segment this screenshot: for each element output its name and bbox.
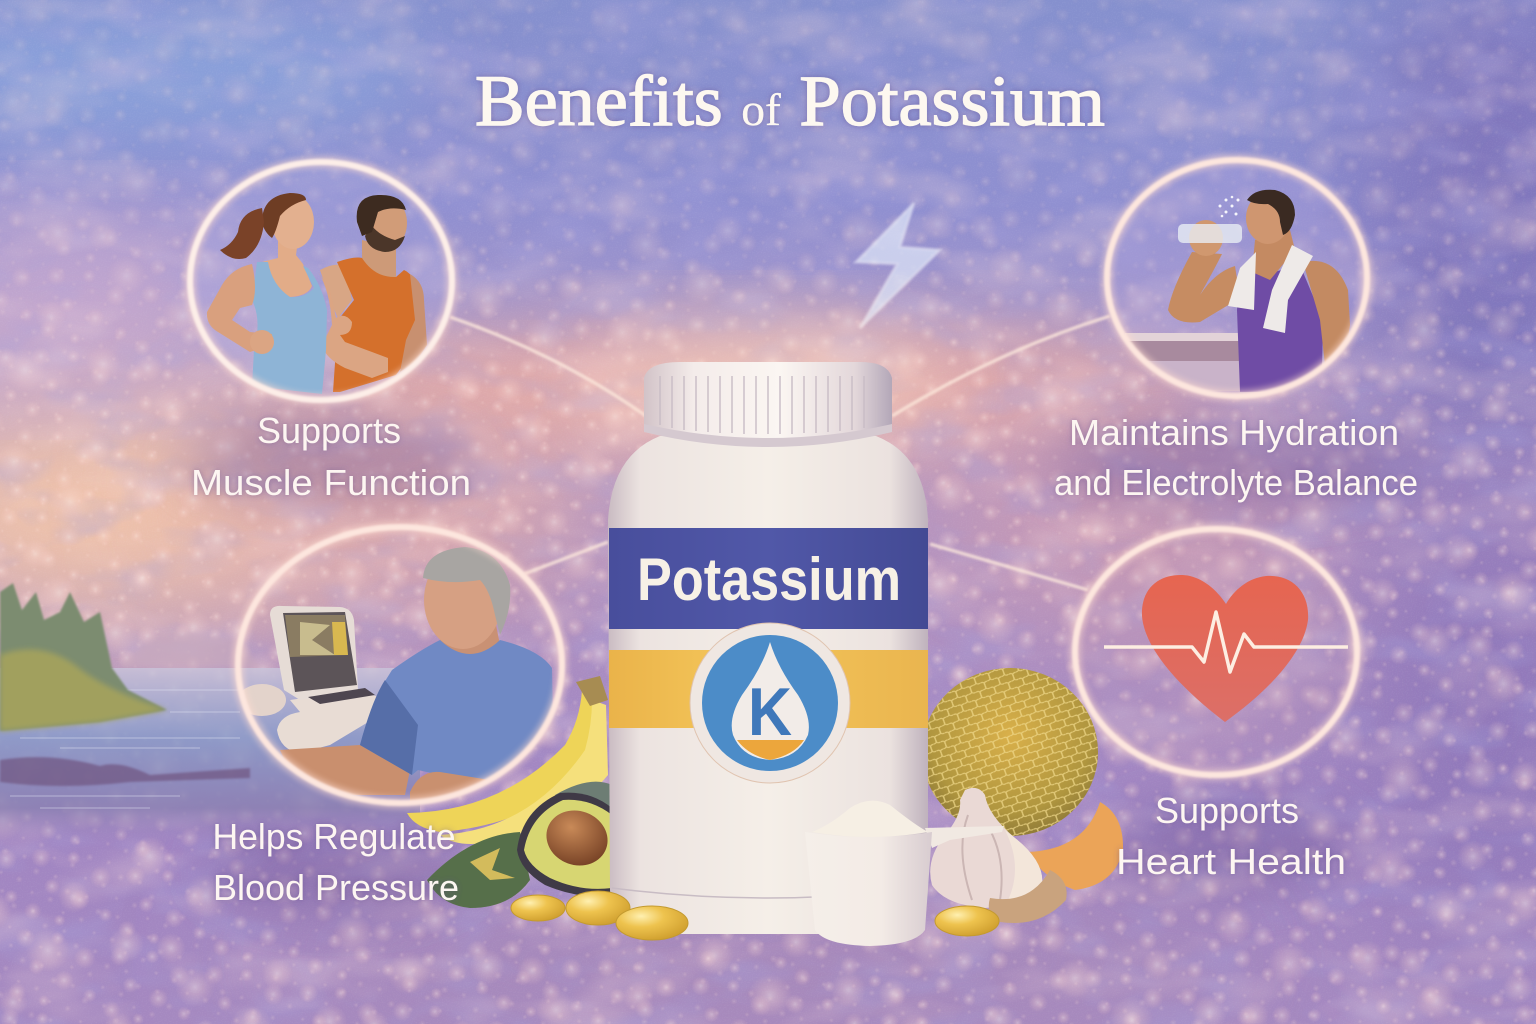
landscape: river and forest at left xyxy=(0,583,420,843)
panel: heart health xyxy=(1075,529,1357,775)
food: spinach leaves xyxy=(427,832,530,908)
bottle base seam xyxy=(612,888,926,898)
label: hydration: Maintains Hydration xyxy=(1069,412,1399,453)
drinking man xyxy=(1168,190,1350,392)
bottle cap xyxy=(644,362,892,447)
food: bananas xyxy=(407,676,608,844)
label: hydration: and Electrolyte Balance xyxy=(1054,462,1418,503)
food: avocado xyxy=(517,782,615,896)
seated man xyxy=(280,547,553,806)
label: heart health: Supports xyxy=(1155,790,1299,831)
logo: potassium K droplet: K xyxy=(748,674,792,750)
icon: heartbeat line xyxy=(1104,612,1348,672)
water bottle and splash xyxy=(1178,196,1242,243)
title: Benefits of Potassium xyxy=(475,61,1105,141)
label: blood pressure: Blood Pressure xyxy=(213,867,459,908)
label: heart health xyxy=(1116,790,1346,882)
panel: muscle function runners xyxy=(190,162,452,400)
bottle body xyxy=(608,436,928,934)
product name: Potassium xyxy=(637,546,901,613)
panel: hydration drinker xyxy=(1107,160,1367,396)
label: hydration xyxy=(1054,412,1418,503)
icon: lightning bolt xyxy=(856,203,940,328)
logo: potassium K droplet xyxy=(690,623,850,783)
yellow band xyxy=(609,650,928,728)
bottle xyxy=(598,330,938,934)
blood pressure monitor xyxy=(244,606,376,750)
food: melon xyxy=(922,668,1123,890)
label: blood pressure xyxy=(212,816,459,908)
powder scoop xyxy=(805,801,1004,946)
woman runner xyxy=(207,193,388,394)
man runner xyxy=(320,195,427,392)
label: muscle function xyxy=(191,410,471,503)
food: garlic xyxy=(930,788,1067,923)
icon: heart xyxy=(1142,575,1308,722)
connector lines xyxy=(450,316,1110,590)
soft shade behind captions xyxy=(180,420,1426,910)
label: muscle function: Supports xyxy=(257,410,401,451)
label: blood pressure: Helps Regulate xyxy=(212,816,456,857)
label: blue band xyxy=(609,528,928,629)
label: heart health: Heart Health xyxy=(1116,841,1346,882)
table xyxy=(1125,333,1240,391)
label: muscle function: Muscle Function xyxy=(191,462,471,503)
panel: blood pressure man xyxy=(238,527,562,806)
food: capsules xyxy=(511,891,688,940)
capsule beside garlic xyxy=(935,906,999,936)
